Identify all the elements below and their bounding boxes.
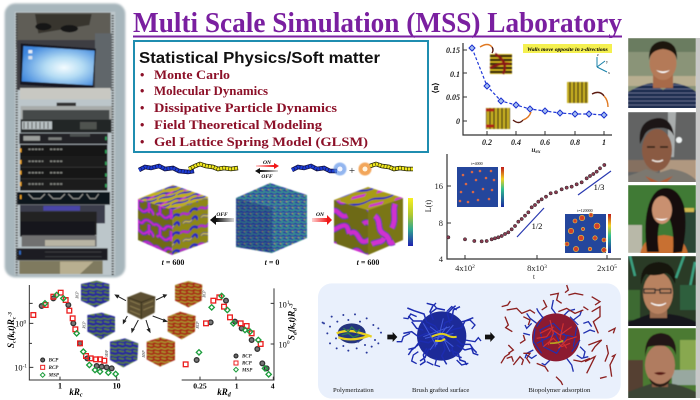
axis labels: 4x10 [455, 263, 472, 273]
right chart axes: 4 [271, 381, 275, 390]
arrow: ON: ON [316, 212, 325, 218]
cube labels: BCP [76, 291, 80, 298]
chart: L(t) vs t [424, 154, 621, 281]
x axis labels: 1 [602, 138, 606, 147]
x axis labels: u [531, 146, 535, 154]
left chart axes: S [6, 343, 16, 348]
axis labels: 4 [439, 254, 444, 264]
biopolymer adsorption [501, 285, 615, 385]
diagram: diblock chains with ON/OFF switching: ON [263, 160, 272, 166]
left chart axes: 10 [15, 320, 23, 329]
axis labels: 8x10 [527, 263, 544, 273]
right chart legend: BCP [241, 355, 253, 360]
x axis labels: ex [535, 149, 541, 155]
right chart axes: 10 [278, 340, 287, 349]
y axis labels: 0 [456, 117, 460, 126]
panel captions: Biopolymer adsorption [528, 387, 591, 394]
arrow [387, 332, 397, 342]
panel: polymer brush adsorption [318, 283, 621, 399]
photo: team member 1 [628, 38, 696, 110]
right chart data [183, 293, 271, 377]
x axis labels: 0.8 [570, 138, 580, 147]
icon: axes [597, 52, 610, 75]
chart: scattering functions with morphology cubes [6, 281, 298, 399]
axis labels: L(t) [424, 199, 433, 212]
photo: team member 4 [628, 256, 696, 328]
axis labels [424, 181, 617, 281]
axis labels: 5 [614, 264, 617, 270]
left chart axes: -3 [8, 312, 14, 317]
right chart axes: -3 [288, 303, 294, 308]
right chart axes: d [292, 332, 298, 335]
arrow [485, 332, 495, 342]
arrow: OFF [210, 212, 234, 225]
left chart legend: MSP [48, 374, 60, 379]
cube labels: RCP [196, 321, 200, 329]
diagram: diblock chains with ON/OFF switching [139, 160, 413, 180]
axis labels: t [533, 273, 535, 281]
right chart axes: 0.25 [193, 381, 207, 390]
right chart axes: (k,t)R [287, 311, 297, 332]
left chart axes: c [80, 393, 83, 399]
left chart axes: c [12, 316, 18, 319]
bullet list of methods: Field Theoretical Modeling [154, 118, 323, 132]
left chart data [31, 290, 118, 377]
polymerization cluster [322, 313, 382, 354]
right chart axes: d [228, 393, 232, 399]
panel captions [333, 387, 591, 394]
morphology insets [486, 54, 588, 129]
x axis labels [482, 138, 606, 155]
inset: t=120000 [565, 208, 611, 253]
cube labels: BCP [203, 290, 207, 297]
left chart axes: c [12, 340, 18, 343]
axis labels: 16 [434, 181, 443, 191]
cube: t = 0 [236, 183, 307, 253]
monitor [20, 43, 96, 89]
photo: team member 2 [628, 112, 696, 184]
right chart axes [182, 288, 298, 399]
right chart axes: 1 [287, 300, 290, 306]
right chart legend: RCP [242, 362, 253, 367]
bullet list of methods: • [140, 135, 144, 149]
right chart axes: 1 [235, 381, 239, 390]
colour bar [408, 198, 413, 246]
left chart axes: (k,t)R [6, 319, 16, 340]
photo: team member 3 [628, 185, 696, 255]
panel captions: Polymerization [333, 387, 375, 394]
left chart axes: 0 [23, 319, 26, 325]
x axis labels: 0.6 [540, 138, 550, 147]
data points [447, 163, 606, 243]
panel: statistical physics methods [134, 41, 428, 152]
bullet list of methods: • [140, 84, 144, 98]
bullet list of methods: Gel Lattice Spring Model (GLSM) [154, 135, 368, 149]
left chart legend: BCP [48, 359, 59, 364]
title: Multi Scale Simulation (MSS) Laboratory [133, 7, 622, 39]
axis labels: 2 [472, 264, 475, 270]
slope lines [517, 171, 611, 237]
axis labels: 8 [439, 218, 443, 228]
note: walls move: Walls move opposite in z-directions [527, 47, 608, 53]
cube time labels: t = 600 [162, 258, 184, 267]
cube labels: RCP [82, 321, 86, 329]
curved arrows [480, 44, 608, 122]
right chart axes: kR [217, 387, 228, 397]
inset: t=120000: t=120000 [577, 208, 593, 213]
left chart axes: kR [69, 387, 80, 397]
cube labels: MSP [142, 350, 146, 359]
right chart axes: S [287, 335, 297, 340]
icon: axes: x [608, 70, 610, 75]
right chart axes: d [292, 308, 298, 311]
diagram: diblock chains with ON/OFF switching: + [349, 165, 355, 177]
data series [472, 48, 604, 115]
bullet list of methods: • [140, 101, 144, 115]
chart: n vs u_ex: ⟨n⟩ [431, 83, 440, 93]
right chart axes: 0 [287, 340, 290, 346]
right chart legend [234, 354, 253, 373]
arrows from central cube [115, 295, 167, 332]
left chart legend: RCP [49, 366, 59, 371]
inset: t=4000: t=4000 [471, 161, 483, 166]
icon: axes: z [597, 52, 599, 57]
arrow: ON [312, 212, 332, 225]
bullet list of methods: • [140, 118, 144, 132]
y axis labels: 0.1 [450, 70, 460, 79]
heading: statistical physics: Statistical Physics/Soft matter [139, 50, 380, 67]
cube labels: MSP [105, 349, 109, 358]
x axis labels: 0.4 [511, 138, 521, 147]
bullet list of methods: Dissipative Particle Dynamics [154, 101, 337, 115]
bullet list of methods [140, 68, 368, 149]
photo: team member 5 [628, 328, 696, 400]
cube time labels: t = 0 [265, 258, 279, 267]
chart: n vs u_ex [431, 43, 612, 155]
left chart legend [40, 358, 60, 379]
inset: t=4000 [457, 161, 504, 207]
photo: server rack [5, 3, 125, 277]
left chart axes [6, 285, 121, 399]
y axis labels [446, 46, 460, 126]
axis labels: 3 [544, 264, 547, 270]
diagram: diblock chains with ON/OFF switching: OFF [261, 174, 273, 180]
brush grafted particle [397, 303, 481, 367]
x axis labels: 0.2 [482, 138, 492, 147]
cube: t = 600 ON [334, 187, 403, 255]
left chart axes: 1 [58, 381, 62, 390]
left chart axes: -1 [23, 363, 27, 369]
cube: t = 600 OFF [138, 185, 208, 255]
chart: L(t) vs t: 1/3 [594, 182, 604, 192]
arrow: OFF: OFF [216, 212, 228, 218]
bullet list of methods: • [140, 68, 144, 82]
cube time labels: t = 600 [357, 258, 379, 267]
servers [17, 133, 110, 205]
chart: L(t) vs t: 1/2 [532, 221, 542, 231]
left chart axes: 10 [113, 381, 121, 390]
left chart axes: 10 [14, 364, 23, 373]
right chart legend: MSP [241, 368, 253, 373]
panel captions: Brush grafted surface [412, 387, 470, 394]
right chart axes: 10 [278, 300, 287, 309]
y axis labels: 0.05 [446, 93, 460, 102]
cube labels [76, 290, 207, 359]
cube time labels [162, 258, 379, 267]
note: walls move [523, 44, 612, 53]
bullet list of methods: Molecular Dynamics [154, 84, 268, 98]
y axis labels: 0.15 [446, 46, 460, 55]
morphology cubes [81, 281, 202, 367]
bullet list of methods: Monte Carlo [154, 68, 230, 82]
right edge shade [696, 38, 700, 398]
icon: axes: y [606, 59, 608, 64]
axis labels: 2x10 [597, 263, 614, 273]
